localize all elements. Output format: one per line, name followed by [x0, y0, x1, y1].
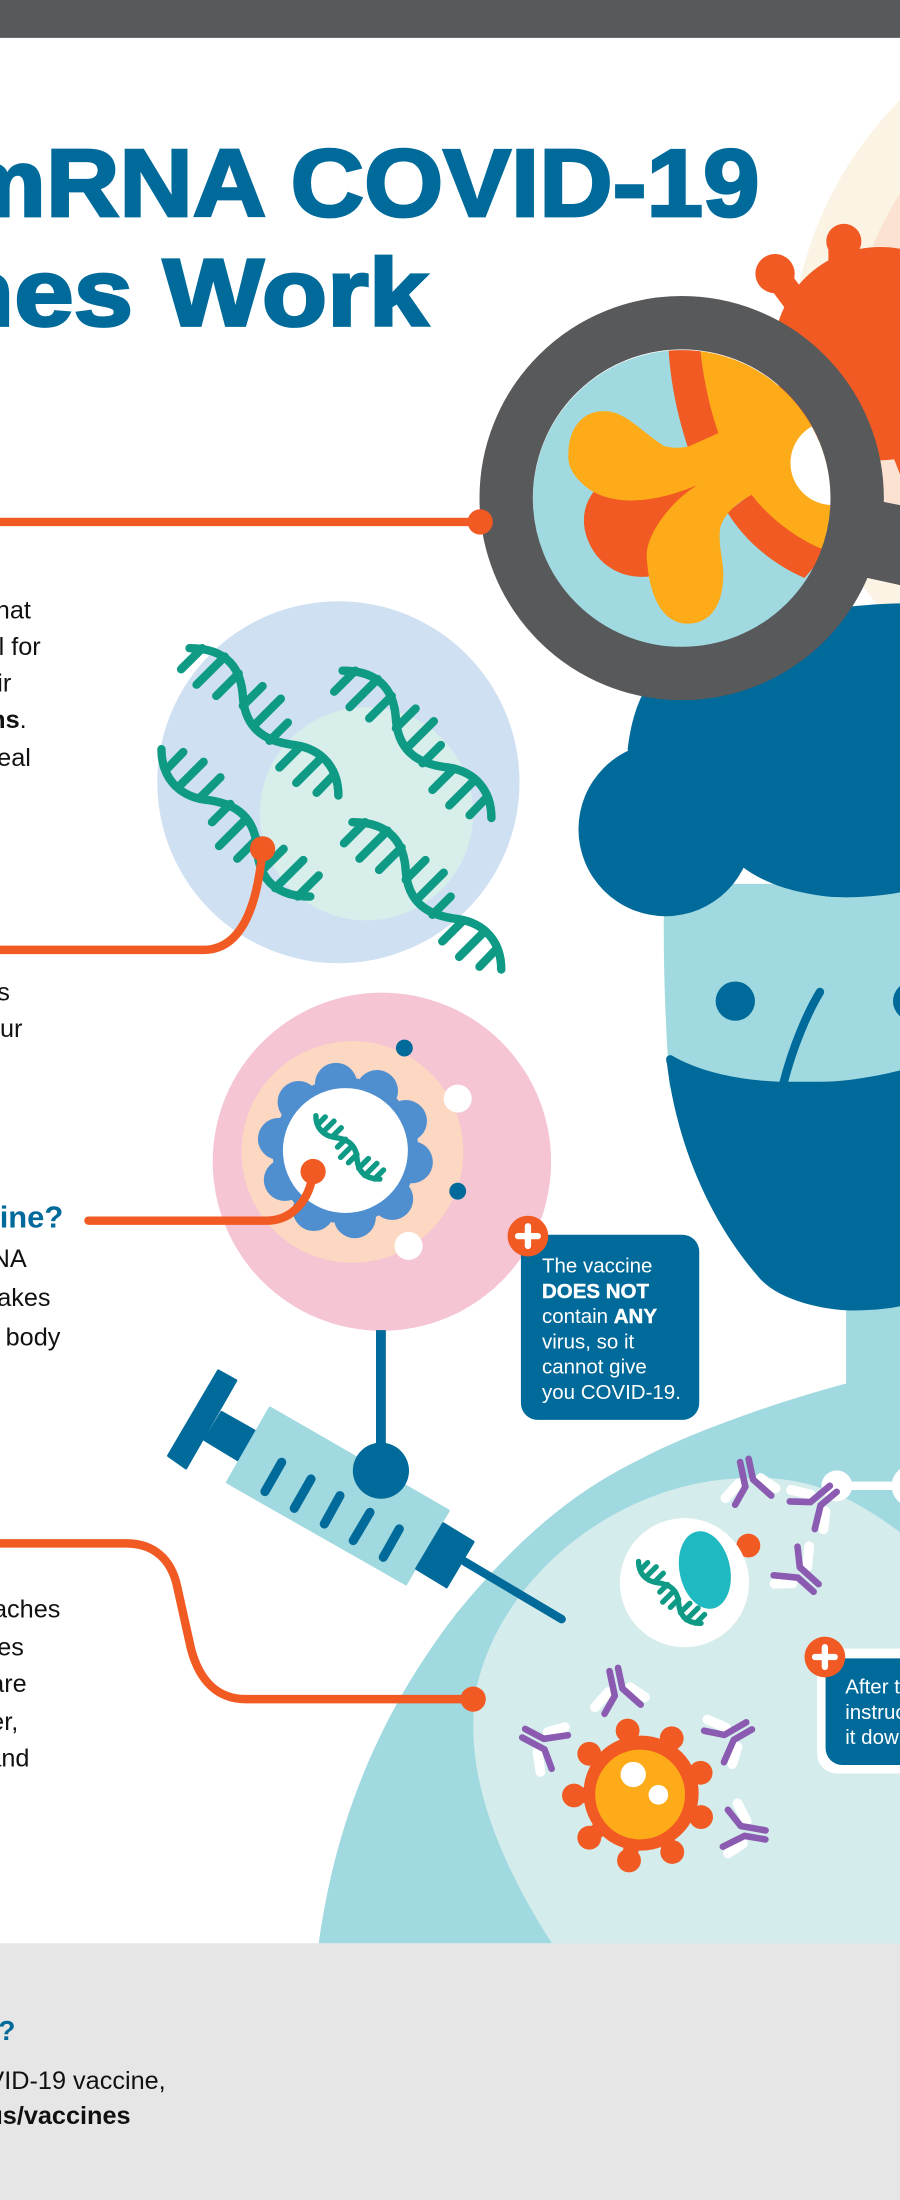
text block: step 4 [0, 1596, 60, 1772]
antibody [719, 1455, 777, 1506]
nucleus [672, 1526, 738, 1614]
connector: step 1 [0, 509, 493, 535]
footer panel [0, 1943, 900, 2200]
antibody [511, 1711, 572, 1776]
figure: hair [578, 603, 900, 916]
graduations [265, 1462, 399, 1557]
callout: after the instructions [805, 1637, 900, 1773]
white connector [821, 1465, 900, 1507]
lens contents [533, 350, 830, 647]
mRNA strand [161, 749, 319, 897]
handle [842, 494, 900, 585]
callout: no virus: cannot give [542, 1356, 647, 1379]
mRNA strand [334, 671, 491, 818]
syringe [168, 1330, 562, 1619]
callout: no virus: contain ANY [542, 1305, 657, 1328]
connector: particle to syringe [353, 1330, 409, 1499]
mRNA strand [181, 648, 338, 796]
figure: eye left [716, 981, 755, 1021]
callout: no virus: DOES NOT [542, 1280, 649, 1303]
callout: no virus: you COVID-19. [542, 1381, 681, 1404]
connector: step 2 [0, 836, 275, 950]
lipid shell [258, 1063, 433, 1238]
antibody [588, 1664, 647, 1715]
mRNA strand in particle [316, 1116, 383, 1179]
hub [417, 1524, 473, 1587]
figure: mask [666, 1055, 900, 1310]
coronavirus [562, 1719, 713, 1872]
connector: step 4 [0, 1543, 486, 1712]
cell [620, 1518, 760, 1647]
connector: step 3 [88, 1159, 326, 1221]
icon: plus [508, 1216, 548, 1256]
barrel [227, 1408, 448, 1584]
antibody [785, 1468, 850, 1534]
antibody [769, 1541, 834, 1607]
figure: shoulders [319, 1375, 900, 1943]
panel: mRNA strands [157, 601, 520, 970]
needle [465, 1562, 562, 1619]
figure: neck [846, 1298, 900, 1396]
figure: face [664, 884, 900, 1087]
figure: chest [473, 1478, 900, 1943]
figure: coronavirus behind lens [755, 224, 900, 474]
mRNA strand [344, 822, 501, 970]
callout: no virus: virus, so it [542, 1330, 635, 1353]
title [0, 130, 760, 346]
figure: nose [783, 992, 820, 1083]
top bar [0, 0, 900, 38]
figure: background halo [790, 0, 900, 739]
antibody [720, 1802, 771, 1859]
mRNA strand in cell [639, 1561, 705, 1623]
panel: vaccine particle [213, 993, 551, 1331]
text block: step 3 [0, 1245, 61, 1352]
plunger [168, 1371, 260, 1468]
antibody [700, 1703, 762, 1768]
callout: no virus [508, 1216, 699, 1420]
ring [506, 323, 857, 673]
figure: eye right [893, 981, 900, 1021]
magnifying glass [506, 323, 900, 673]
icon: plus [805, 1637, 845, 1677]
text block: step 2 [0, 978, 22, 1043]
text block: mRNA intro [0, 597, 41, 772]
callout: no virus: The vaccine [542, 1255, 652, 1278]
